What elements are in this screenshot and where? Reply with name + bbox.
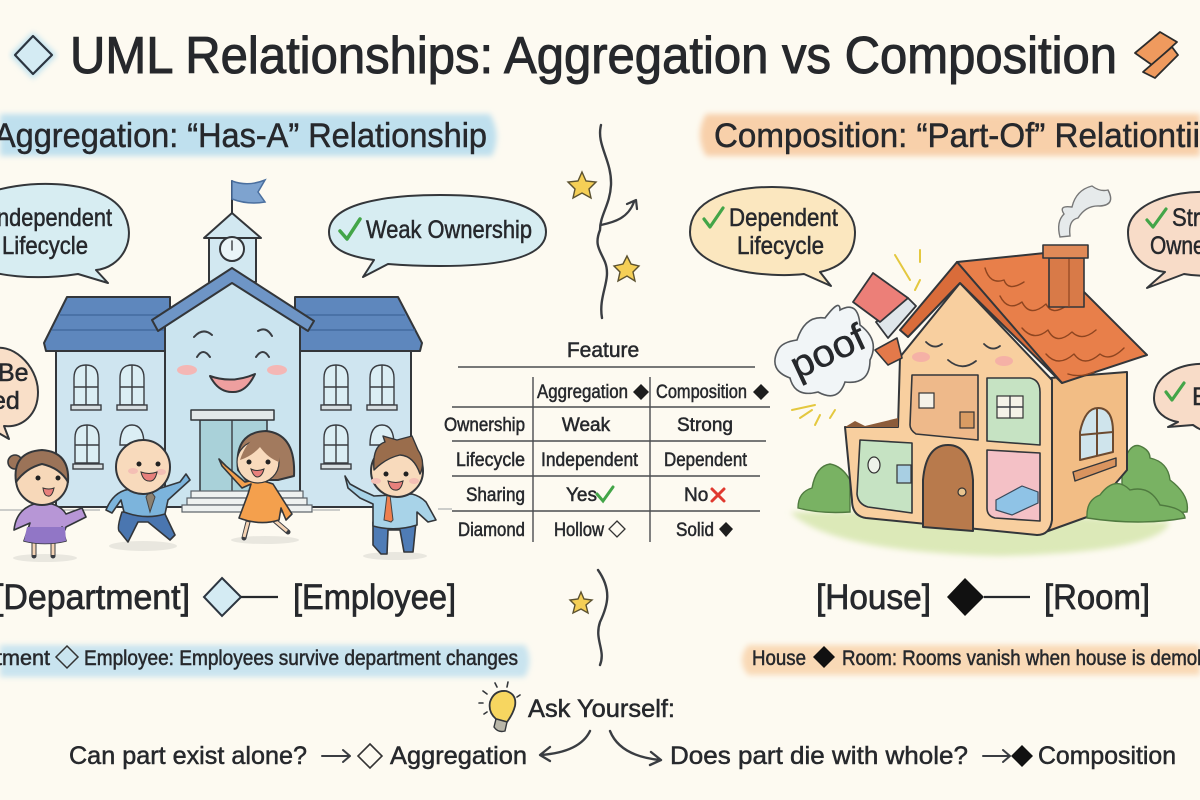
table: feature comparison: Independent	[541, 450, 639, 471]
room: green lower	[857, 440, 912, 513]
table: feature comparison: Solid	[676, 520, 714, 541]
speech bubble: independent lifecycle: Lifecycle	[2, 232, 88, 260]
heading: composition: Composition: “Part-Of” Relationtii	[714, 117, 1200, 155]
icon: solid diamond	[813, 646, 835, 668]
right bush back	[1122, 446, 1187, 516]
table: feature comparison: Hollow	[554, 520, 604, 541]
poof text: poof	[784, 316, 873, 388]
panel: aggregation heading	[0, 114, 497, 156]
spark lines	[792, 250, 920, 425]
blue roofs	[44, 297, 422, 351]
decision: does part die with whole: Does part die with whole?	[670, 742, 968, 770]
side wall	[1037, 372, 1127, 535]
speech bubble: can be shared	[0, 348, 38, 439]
panel: composition heading	[700, 114, 1200, 156]
caption: aggregation	[0, 645, 530, 677]
entrance door and lintel	[191, 410, 274, 492]
arrow: association line	[984, 596, 1030, 598]
roof	[957, 253, 1147, 383]
icon: hollow diamond	[56, 646, 78, 668]
ask yourself prompt	[479, 682, 675, 732]
table: feature comparison: Strong	[677, 415, 733, 436]
speech bubble: strong ownership	[1128, 192, 1200, 288]
icon: orange composition blocks	[1135, 32, 1178, 78]
smoke	[1059, 186, 1111, 237]
arrow: association line	[241, 596, 278, 598]
room: green upper	[987, 378, 1040, 445]
icon: red cross	[712, 489, 724, 501]
centre section	[165, 280, 300, 507]
room: pink with bed	[987, 450, 1040, 521]
table: feature comparison: Sharing	[466, 485, 525, 506]
roof gable band	[900, 262, 1062, 383]
icon: green check	[340, 219, 360, 239]
clock tower	[204, 213, 261, 282]
icon: green check	[597, 487, 613, 501]
school face	[177, 329, 287, 392]
character: woman in purple	[8, 450, 86, 562]
icon: solid composition diamond	[947, 578, 984, 616]
heading: aggregation: Aggregation: “Has-A” Relationship	[0, 117, 487, 155]
decision: does part die with whole: Composition	[1038, 742, 1176, 770]
eraser	[853, 273, 916, 338]
side window	[1073, 408, 1116, 481]
poof cloud	[775, 306, 873, 396]
star	[570, 592, 592, 613]
icon: hollow diamond	[609, 521, 625, 537]
icon: hollow diamond	[358, 744, 382, 768]
flag	[232, 180, 265, 213]
broken wall edge	[845, 418, 898, 427]
speech bubble: exclusive	[1154, 364, 1200, 432]
diagram: department and employee: [Employee]	[293, 578, 456, 617]
heading band: composition	[700, 114, 1200, 156]
diagram: house and room: [House]	[816, 578, 931, 617]
table: feature comparison: No	[684, 485, 708, 506]
table: feature comparison	[444, 339, 770, 542]
speech bubble: weak ownership	[329, 195, 546, 277]
arrow: ask to aggregation	[540, 731, 590, 761]
arrow: ask to composition	[610, 731, 661, 765]
icon: hollow aggregation diamond	[204, 578, 241, 616]
chimney	[1043, 245, 1088, 307]
arrow	[322, 750, 350, 762]
table: feature comparison: Dependent	[664, 450, 748, 471]
decision: does part die with whole	[670, 742, 1176, 770]
roof fragment	[875, 338, 902, 365]
character: woman in orange	[219, 431, 299, 544]
icon: green check	[704, 208, 723, 227]
left bush	[798, 464, 850, 512]
table: feature comparison: Weak	[562, 415, 611, 436]
icon: solid diamond	[1011, 745, 1033, 767]
title text: UML Relationships: Aggregation vs Composition	[70, 27, 1117, 85]
decision: can part exist alone: Aggregation	[390, 742, 527, 770]
windows	[71, 365, 397, 469]
house face	[912, 342, 1013, 366]
icon: hollow diamond	[10, 32, 57, 79]
room: orange	[910, 375, 978, 440]
character: bald man in blue	[106, 440, 190, 551]
table: feature comparison: Feature	[567, 339, 639, 362]
table grid	[452, 367, 770, 542]
speech bubble: independent lifecycle	[0, 184, 129, 283]
icon: diamond	[633, 384, 649, 400]
table: feature comparison: Composition	[656, 382, 747, 403]
caption: composition	[742, 645, 1200, 675]
caption: composition: House	[752, 647, 806, 670]
room details	[868, 393, 1023, 483]
star	[614, 256, 639, 281]
arrow	[983, 750, 1010, 762]
caption: aggregation: Employee: Employees survive department changes	[84, 647, 518, 670]
diagram: house and room: [Room]	[1044, 578, 1150, 617]
heading band: aggregation	[0, 114, 497, 156]
speech bubble: dependent lifecycle: Dependent	[729, 204, 838, 232]
roof tiles	[985, 268, 1124, 376]
icon: light bulb	[479, 682, 520, 732]
illustration: smiling school building	[0, 180, 452, 512]
table: feature comparison: Lifecycle	[456, 450, 525, 471]
ask yourself prompt: Ask Yourself:	[528, 695, 675, 723]
diagram: department and employee: [Department]	[0, 578, 190, 617]
ground line	[0, 509, 452, 510]
star	[568, 172, 596, 198]
icon: diamond	[753, 384, 769, 400]
speech bubble: dependent lifecycle	[690, 187, 855, 286]
table: feature comparison: Yes	[566, 485, 597, 506]
icon: solid diamond	[719, 522, 733, 537]
door	[923, 445, 973, 531]
table: feature comparison: Diamond	[458, 520, 525, 541]
table: feature comparison: Aggregation	[537, 382, 628, 403]
decision: can part exist alone: Can part exist alone?	[69, 742, 307, 770]
speech bubble: dependent lifecycle: Lifecycle	[737, 232, 824, 260]
decoration: upper wavy divider with stars	[568, 125, 639, 318]
illustration: house being erased	[775, 186, 1187, 556]
right bush front	[1087, 484, 1185, 522]
decision: can part exist alone	[69, 742, 527, 770]
speech bubble: weak ownership: Weak Ownership	[366, 216, 532, 244]
decoration: lower wavy divider with star	[570, 570, 607, 665]
title	[10, 27, 1178, 85]
character: man with orange tie	[345, 436, 436, 560]
wings	[56, 350, 411, 507]
table: feature comparison: Ownership	[444, 415, 525, 436]
centre gable roof	[152, 268, 314, 331]
diagram: house and room	[816, 578, 1150, 617]
diagram: department and employee	[0, 578, 456, 617]
grass	[790, 512, 1170, 556]
front wall	[845, 283, 1052, 535]
entrance steps	[182, 491, 312, 512]
